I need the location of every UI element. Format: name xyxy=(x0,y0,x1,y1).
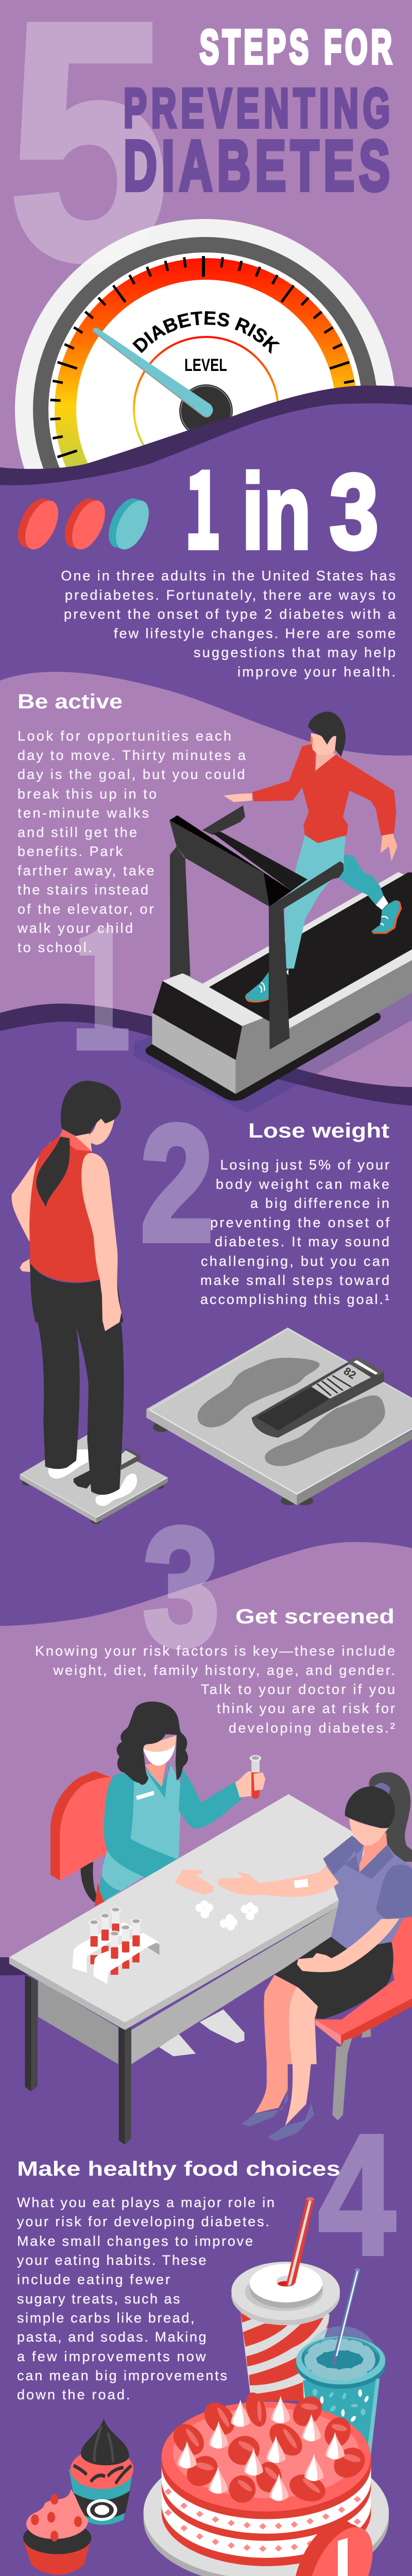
scale readout: 82: 82 xyxy=(341,1365,358,1382)
lose weight heading: Lose weight xyxy=(248,1120,389,1142)
be active text: benefits. Park xyxy=(18,844,123,859)
wave: intro panel xyxy=(0,403,412,721)
food choices text xyxy=(17,2195,274,2402)
food choices text: down the road. xyxy=(17,2387,130,2402)
be active text: Look for opportunities each xyxy=(18,728,231,744)
be active text: to school. xyxy=(18,940,92,955)
treadmill base xyxy=(145,855,412,1101)
panel: healthy food background xyxy=(0,1906,412,2576)
intro text: suggestions that may help xyxy=(194,645,396,660)
treadmill front arm and post xyxy=(269,861,344,1049)
food choices text: can mean big improvements xyxy=(17,2368,227,2383)
desk leg ends xyxy=(25,2061,131,2145)
icon: three discs, one in three xyxy=(11,494,156,554)
panel: get screened background xyxy=(0,1542,412,1973)
wave: dark band top xyxy=(0,385,412,515)
wave: dark band step 3 xyxy=(0,1888,412,1989)
lose weight text: accomplishing this goal.¹ xyxy=(200,1292,389,1307)
lose weight text xyxy=(200,1157,389,1307)
big numeral 2: 2 xyxy=(141,1091,213,1275)
food choices text: What you eat plays a major role in xyxy=(17,2195,274,2210)
treadmill floor shadow xyxy=(134,975,412,1113)
patient xyxy=(218,1772,412,2064)
treadmill console xyxy=(169,805,307,907)
food choices text: sugary treats, such as xyxy=(17,2291,180,2307)
runner legs xyxy=(245,855,402,1003)
lose weight text: Losing just 5% of your xyxy=(220,1157,389,1173)
background: top light purple band xyxy=(0,0,412,515)
food choices text: simple carbs like bread, xyxy=(17,2310,195,2326)
big numeral 1: 1 xyxy=(68,855,135,1098)
gauge needle xyxy=(93,328,213,417)
test tube in hand xyxy=(250,1755,265,1799)
title xyxy=(124,21,396,206)
get screened heading: Get screened xyxy=(235,1605,394,1628)
wave: dark band step 1 xyxy=(0,1004,412,1185)
lose weight text: make small steps toward xyxy=(200,1273,389,1288)
statistic: 1 in 3: 1 xyxy=(184,426,221,579)
back cupcake xyxy=(69,2418,133,2525)
lose weight text: diabetes. It may sound xyxy=(215,1234,389,1249)
be active text: walk your child xyxy=(17,921,133,936)
intro text: One in three adults in the United States has xyxy=(61,568,396,583)
front cupcakes xyxy=(23,2418,133,2575)
food choices text: include eating fewer xyxy=(17,2272,170,2287)
icon: alert disc xyxy=(281,2511,386,2576)
small teal drink cup xyxy=(296,2268,385,2456)
get screened text: Talk to your doctor if you xyxy=(201,1682,395,1697)
intro text: improve your health. xyxy=(237,664,396,680)
intro text xyxy=(61,568,396,680)
large scale close-up xyxy=(146,1328,412,1505)
food choices text: a few improvements now xyxy=(17,2349,206,2364)
runner torso xyxy=(224,711,397,871)
food choices heading: Make healthy food choices xyxy=(17,2158,340,2180)
be active text: day to move. Thirty minutes a xyxy=(18,748,246,763)
be active text: of the elevator, or xyxy=(18,902,153,917)
food choices text: pasta, and sodas. Making xyxy=(17,2329,206,2345)
get screened text xyxy=(35,1643,395,1736)
get screened text: think you are at risk for xyxy=(217,1701,395,1716)
be active heading: Be active xyxy=(18,690,123,713)
gauge hub xyxy=(179,384,233,438)
get screened text: Knowing your risk factors is key—these include xyxy=(35,1643,395,1659)
woman on scale xyxy=(12,1081,168,1524)
panel: lose weight background xyxy=(0,1022,412,1597)
large striped soda cup xyxy=(231,2197,340,2401)
food choices text: Make small changes to improve xyxy=(17,2233,253,2249)
food choices text: your risk for developing diabetes. xyxy=(17,2214,269,2229)
be active text: the stairs instead xyxy=(18,882,148,897)
desk xyxy=(9,1794,394,2064)
strawberry cake xyxy=(144,2387,389,2576)
be active text xyxy=(17,728,246,955)
gauge label: level: LEVEL xyxy=(184,355,227,375)
lose weight text: preventing the onset of xyxy=(210,1215,389,1230)
big numeral 3: 3 xyxy=(143,1493,219,1680)
statistic: 1 in 3: 3 xyxy=(330,452,379,571)
get screened text: developing diabetes.² xyxy=(229,1720,395,1736)
intro text: few lifestyle changes. Here are some xyxy=(114,626,396,641)
be active text: farther away, take xyxy=(18,863,154,878)
food choices text: your eating habits. These xyxy=(17,2252,206,2268)
patient chair xyxy=(315,1862,412,2056)
woman's upper body xyxy=(12,1081,122,1331)
doctor in scrubs xyxy=(99,1702,265,1901)
risk gauge xyxy=(15,219,394,469)
illustration: sugary food xyxy=(23,2197,389,2576)
illustration: blood test at a desk xyxy=(9,1702,412,2145)
lose weight text: body weight can make xyxy=(216,1177,389,1192)
intro text: prevent the onset of type 2 diabetes with a xyxy=(64,606,396,622)
front cupcake xyxy=(23,2489,92,2575)
panel: be active background xyxy=(0,672,412,1133)
doctor chair xyxy=(50,1771,113,1906)
doctor's hand on desk xyxy=(175,1870,214,1894)
big numeral 4: 4 xyxy=(318,2099,397,2291)
be active text: break this up in to xyxy=(18,786,157,802)
test tube rack xyxy=(72,1907,160,1984)
cotton balls xyxy=(196,1901,259,1930)
statistic: 1 in 3: in xyxy=(242,452,311,571)
legs and shoes below the desk xyxy=(242,2046,348,2141)
doctor's shoes xyxy=(159,2009,244,2056)
intro text: prediabetes. Fortunately, there are ways to xyxy=(65,587,396,603)
lose weight text: challenging, but you can xyxy=(201,1253,389,1269)
woman's pants xyxy=(30,1263,124,1495)
lose weight text: a big difference in xyxy=(250,1195,389,1211)
get screened text: weight, diet, family history, age, and gender. xyxy=(53,1663,395,1678)
illustration: person on treadmill xyxy=(134,711,412,1113)
small scale xyxy=(20,1435,168,1524)
be active text: day is the goal, but you could xyxy=(18,767,245,782)
gauge label: diabetes risk: DIABETES RISK xyxy=(132,311,280,354)
statistic: 1 in 3 xyxy=(184,426,379,579)
be active text: ten-minute walks xyxy=(18,805,149,821)
be active text: and still get the xyxy=(18,824,137,840)
